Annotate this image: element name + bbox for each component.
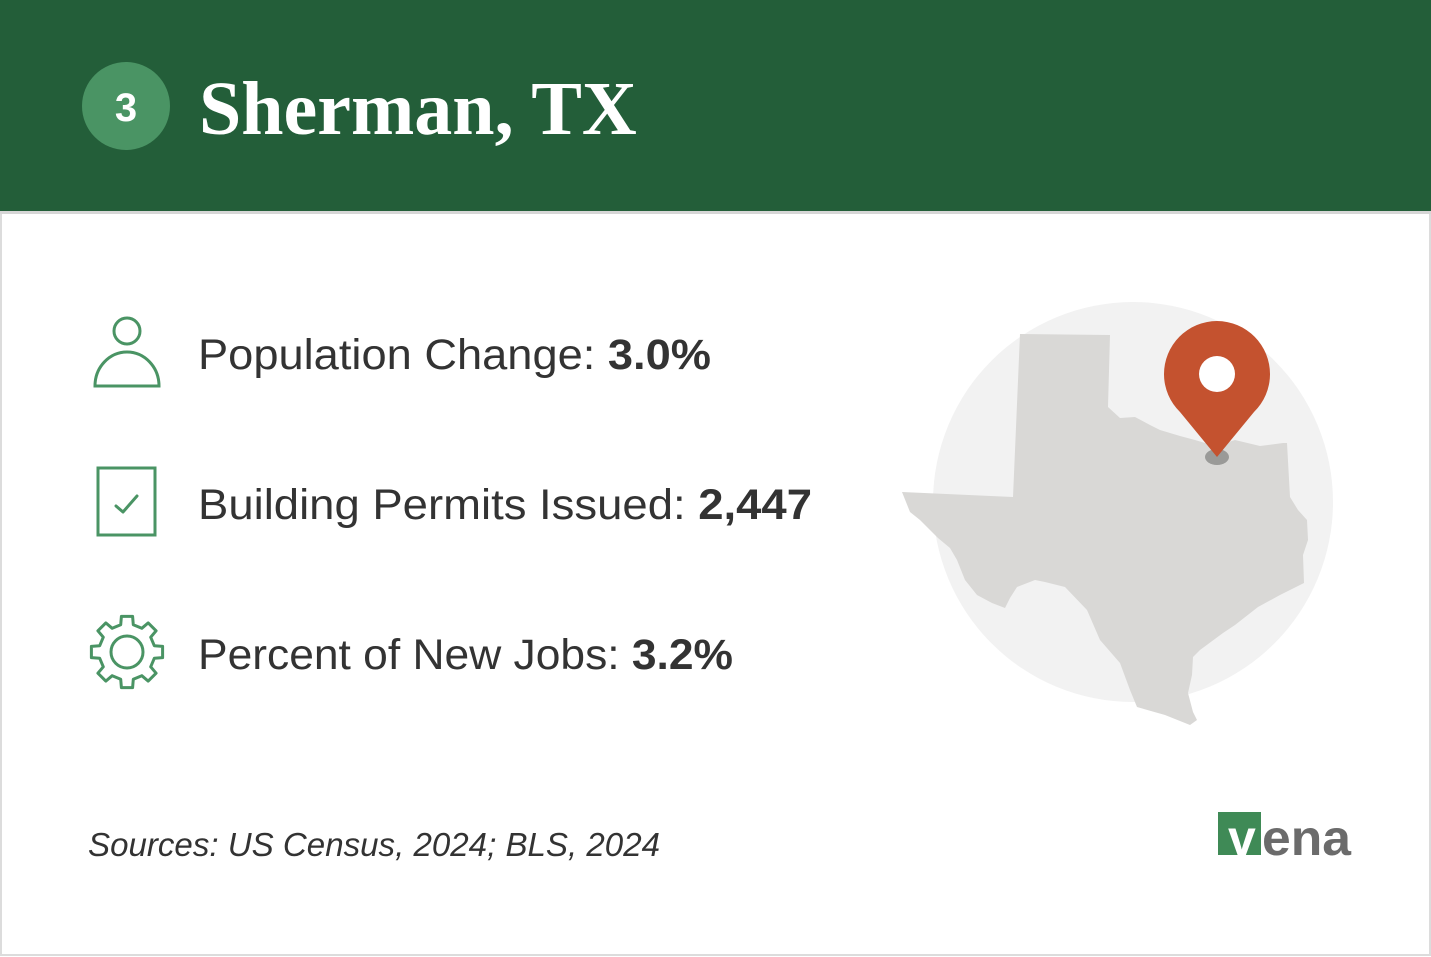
badge: number 3 [82, 62, 170, 150]
stat: building permits: Building Permits Issued: 2,447 [198, 481, 812, 529]
stat: new jobs: Percent of New Jobs: 3.2% [198, 631, 733, 679]
icon: person [95, 318, 159, 386]
pin shadow [1205, 449, 1229, 465]
map: Texas with location pin [902, 302, 1333, 725]
stat: new jobs [91, 616, 733, 688]
stat: population [95, 318, 711, 386]
stat: population: Population Change: 3.0% [198, 331, 711, 379]
stat: building permits [98, 468, 812, 535]
sources: Sources: US Census, 2024; BLS, 2024 [88, 826, 660, 863]
Texas shape [902, 334, 1308, 725]
logo: vena [1218, 810, 1352, 866]
logo: vena: ena [1262, 810, 1352, 866]
header bar [0, 0, 1431, 214]
logo: vena: v [1228, 810, 1256, 866]
location pin [1164, 321, 1270, 457]
badge: number 3: 3 [115, 86, 137, 130]
icon: gear [91, 616, 163, 688]
icon: document check [98, 468, 155, 535]
title: Sherman, TX [199, 67, 637, 151]
